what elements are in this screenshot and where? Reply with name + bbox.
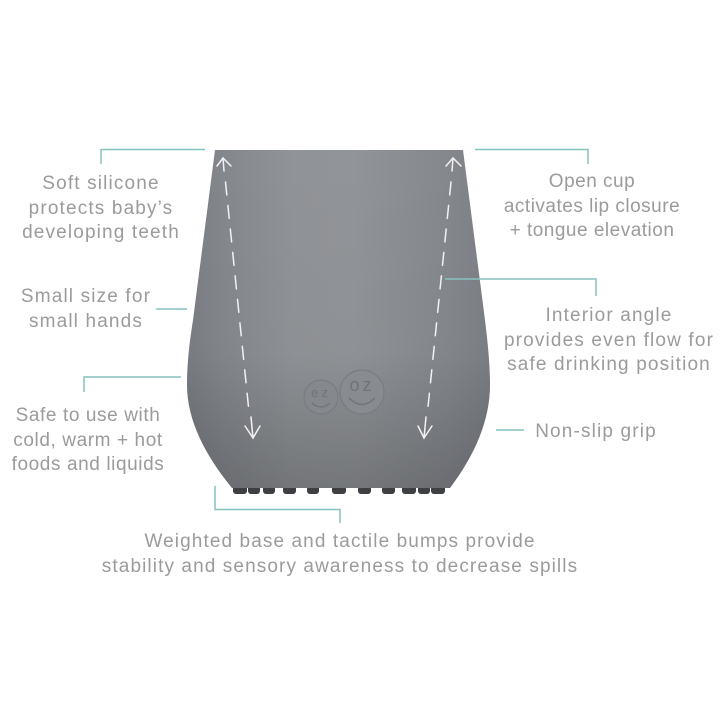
text: open cup bbox=[504, 171, 680, 241]
left dashed arrow bbox=[217, 158, 260, 438]
cup body bbox=[187, 150, 490, 488]
text: small size: small hands bbox=[29, 311, 143, 332]
text: safe to use: cold, warm + hot bbox=[13, 430, 163, 451]
logo: ez small circle bbox=[304, 380, 338, 414]
right dashed arrow bbox=[418, 158, 461, 438]
text: interior angle: provides even flow for bbox=[504, 330, 714, 351]
text: small size bbox=[21, 286, 151, 332]
text: weighted base: Weighted base and tactile bumps provide bbox=[144, 531, 536, 552]
text: interior angle: safe drinking position bbox=[507, 354, 711, 375]
text: soft silicone: developing teeth bbox=[22, 222, 180, 243]
text: soft silicone bbox=[22, 173, 180, 243]
callout lines bbox=[84, 150, 596, 523]
logo: oz large circle: oz bbox=[349, 375, 375, 395]
text: soft silicone: protects baby’s bbox=[29, 198, 173, 219]
text: small size: Small size for bbox=[21, 286, 151, 307]
text: non-slip grip: Non-slip grip bbox=[535, 421, 657, 442]
logo: ez small circle: ez bbox=[311, 385, 331, 400]
text: safe to use bbox=[12, 405, 164, 475]
text: open cup: Open cup bbox=[549, 171, 635, 192]
text: weighted base bbox=[102, 531, 578, 577]
text: weighted base: stability and sensory awareness to decrease spills bbox=[102, 556, 578, 577]
text: open cup: activates lip closure bbox=[504, 196, 680, 217]
logo: oz large circle bbox=[340, 370, 384, 414]
text: safe to use: foods and liquids bbox=[12, 454, 164, 475]
text: safe to use: Safe to use with bbox=[16, 405, 160, 426]
text: interior angle bbox=[504, 305, 714, 375]
text: interior angle: Interior angle bbox=[545, 305, 672, 326]
cup bumps bbox=[233, 485, 445, 494]
text: open cup: + tongue elevation bbox=[510, 220, 674, 241]
text: soft silicone: Soft silicone bbox=[42, 173, 160, 194]
